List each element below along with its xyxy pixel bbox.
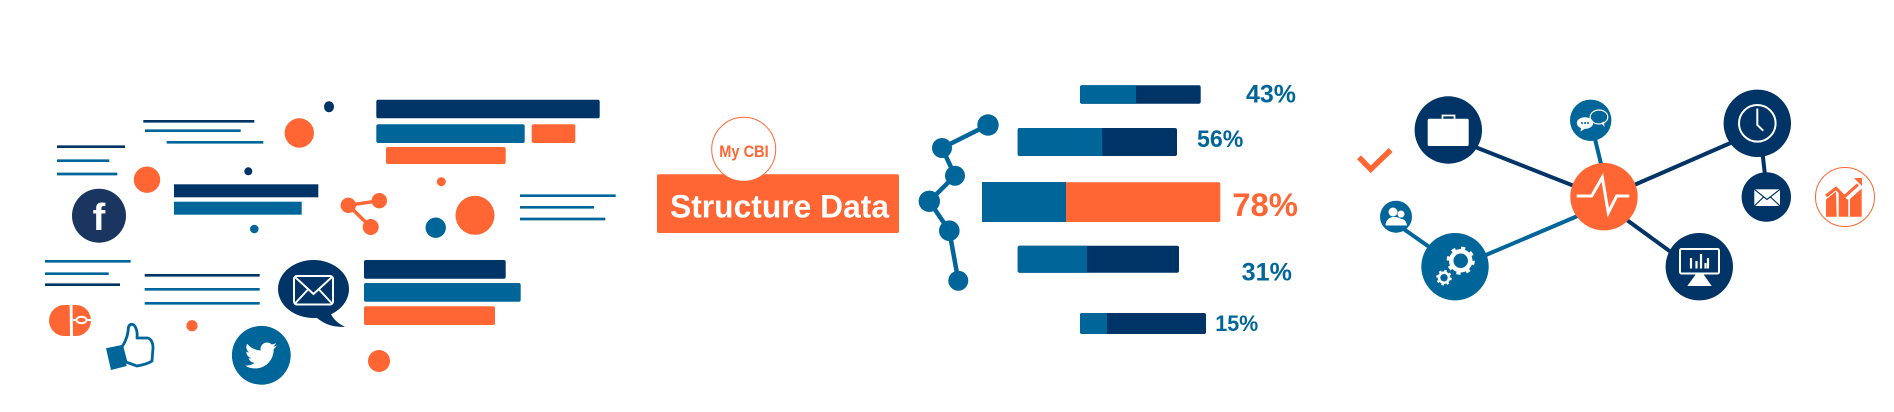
lower right bars group	[364, 260, 521, 325]
orange dot small lower	[186, 320, 198, 331]
left panel: social data cloud	[45, 100, 616, 385]
icon: check mark	[1359, 150, 1391, 169]
icon: facebook	[72, 189, 126, 243]
icon: twitter	[232, 326, 291, 385]
badge: my cbi: My CBI	[719, 142, 769, 161]
icon: mail speech bubble	[278, 260, 349, 327]
bar 56%: 56%	[1197, 126, 1243, 153]
text lines: right	[520, 196, 616, 219]
node: clock	[1724, 90, 1791, 157]
icon: thumbs up	[106, 324, 153, 370]
banner background	[657, 174, 899, 233]
node: monitor	[1666, 233, 1733, 300]
orange dot beside facebook	[134, 166, 160, 193]
icon: growth chart badge	[1816, 168, 1874, 226]
blue dot small	[250, 225, 259, 233]
navy dot top	[324, 101, 334, 112]
text lines: top centre	[143, 121, 263, 142]
bar 56%	[1018, 126, 1243, 156]
node: briefcase	[1415, 96, 1482, 164]
node: envelope	[1742, 172, 1791, 222]
network connectors	[1398, 110, 1765, 258]
orange dot large right	[456, 196, 494, 235]
node: user group	[1380, 201, 1412, 233]
bar chart: percentages	[982, 81, 1298, 336]
orange dot bottom	[368, 350, 390, 372]
panel: network diagram	[1359, 90, 1874, 300]
icon: facebook: f	[93, 197, 106, 239]
text lines: top left	[57, 147, 125, 174]
centre bars pair	[174, 184, 318, 215]
bar 78%	[982, 182, 1298, 223]
orange dot small centre	[437, 177, 446, 186]
node: chat bubbles	[1570, 100, 1611, 141]
bar 15%: 15%	[1215, 311, 1258, 336]
bar 31%	[1018, 246, 1292, 287]
blue dot medium	[426, 218, 446, 238]
navy dot small	[244, 167, 252, 175]
icon: share	[341, 193, 387, 235]
node: gears	[1421, 233, 1489, 300]
node: centre pulse	[1570, 163, 1638, 230]
bar 78%: 78%	[1232, 187, 1298, 223]
text lines: lower centre	[145, 275, 260, 303]
chain of connected nodes	[919, 114, 999, 291]
bar 43%: 43%	[1246, 81, 1296, 109]
bar 43%	[1080, 81, 1296, 109]
text lines: lower left	[45, 261, 131, 285]
icon: orange link mouse	[49, 305, 92, 336]
heading: structure data: Structure Data	[670, 188, 889, 224]
panel: structure data banner	[657, 117, 899, 233]
badge: my cbi	[712, 117, 776, 181]
top right bars group	[376, 100, 600, 164]
bar 15%	[1080, 311, 1258, 336]
bar 31%: 31%	[1242, 259, 1292, 287]
orange dot large top	[285, 118, 314, 148]
